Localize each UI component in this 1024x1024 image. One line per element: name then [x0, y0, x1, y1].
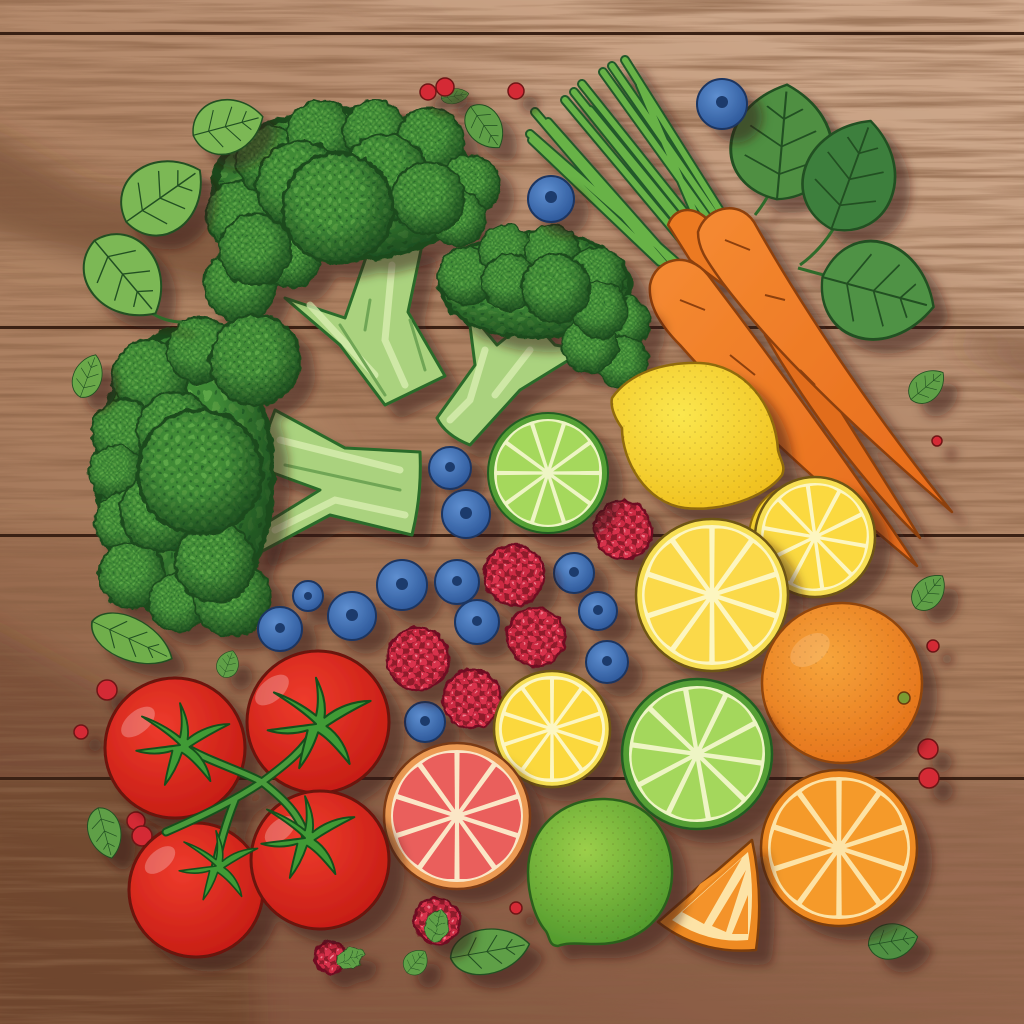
crown of broccoli one [204, 100, 500, 321]
stalk of broccoli two [437, 310, 585, 445]
back lemon slice [749, 477, 877, 597]
large lime slice [621, 679, 773, 829]
grapefruit slice [374, 735, 540, 897]
crown of broccoli three [89, 315, 300, 636]
broccoli three [89, 315, 420, 636]
crown of broccoli two [438, 225, 650, 388]
whole orange [762, 603, 922, 763]
whole lime [528, 799, 672, 946]
orange slice [751, 761, 927, 935]
orange wedge [658, 840, 759, 951]
raspberries [315, 501, 652, 974]
front lemon slice [625, 509, 799, 681]
small leaves scattered [67, 86, 953, 980]
spinach leaves beside carrots [727, 80, 946, 354]
red berries [74, 78, 942, 914]
blueberries [258, 79, 747, 742]
broccoli two [437, 225, 650, 445]
carrot greens [530, 60, 722, 268]
whole lemon [612, 363, 783, 509]
small lemon slice [487, 665, 617, 793]
lime slice [488, 413, 608, 533]
stalk of broccoli three [255, 410, 420, 555]
tomatoes on the vine [105, 651, 389, 957]
carrots [650, 208, 952, 566]
stalk of broccoli one [285, 240, 445, 405]
broccoli one [204, 100, 500, 405]
